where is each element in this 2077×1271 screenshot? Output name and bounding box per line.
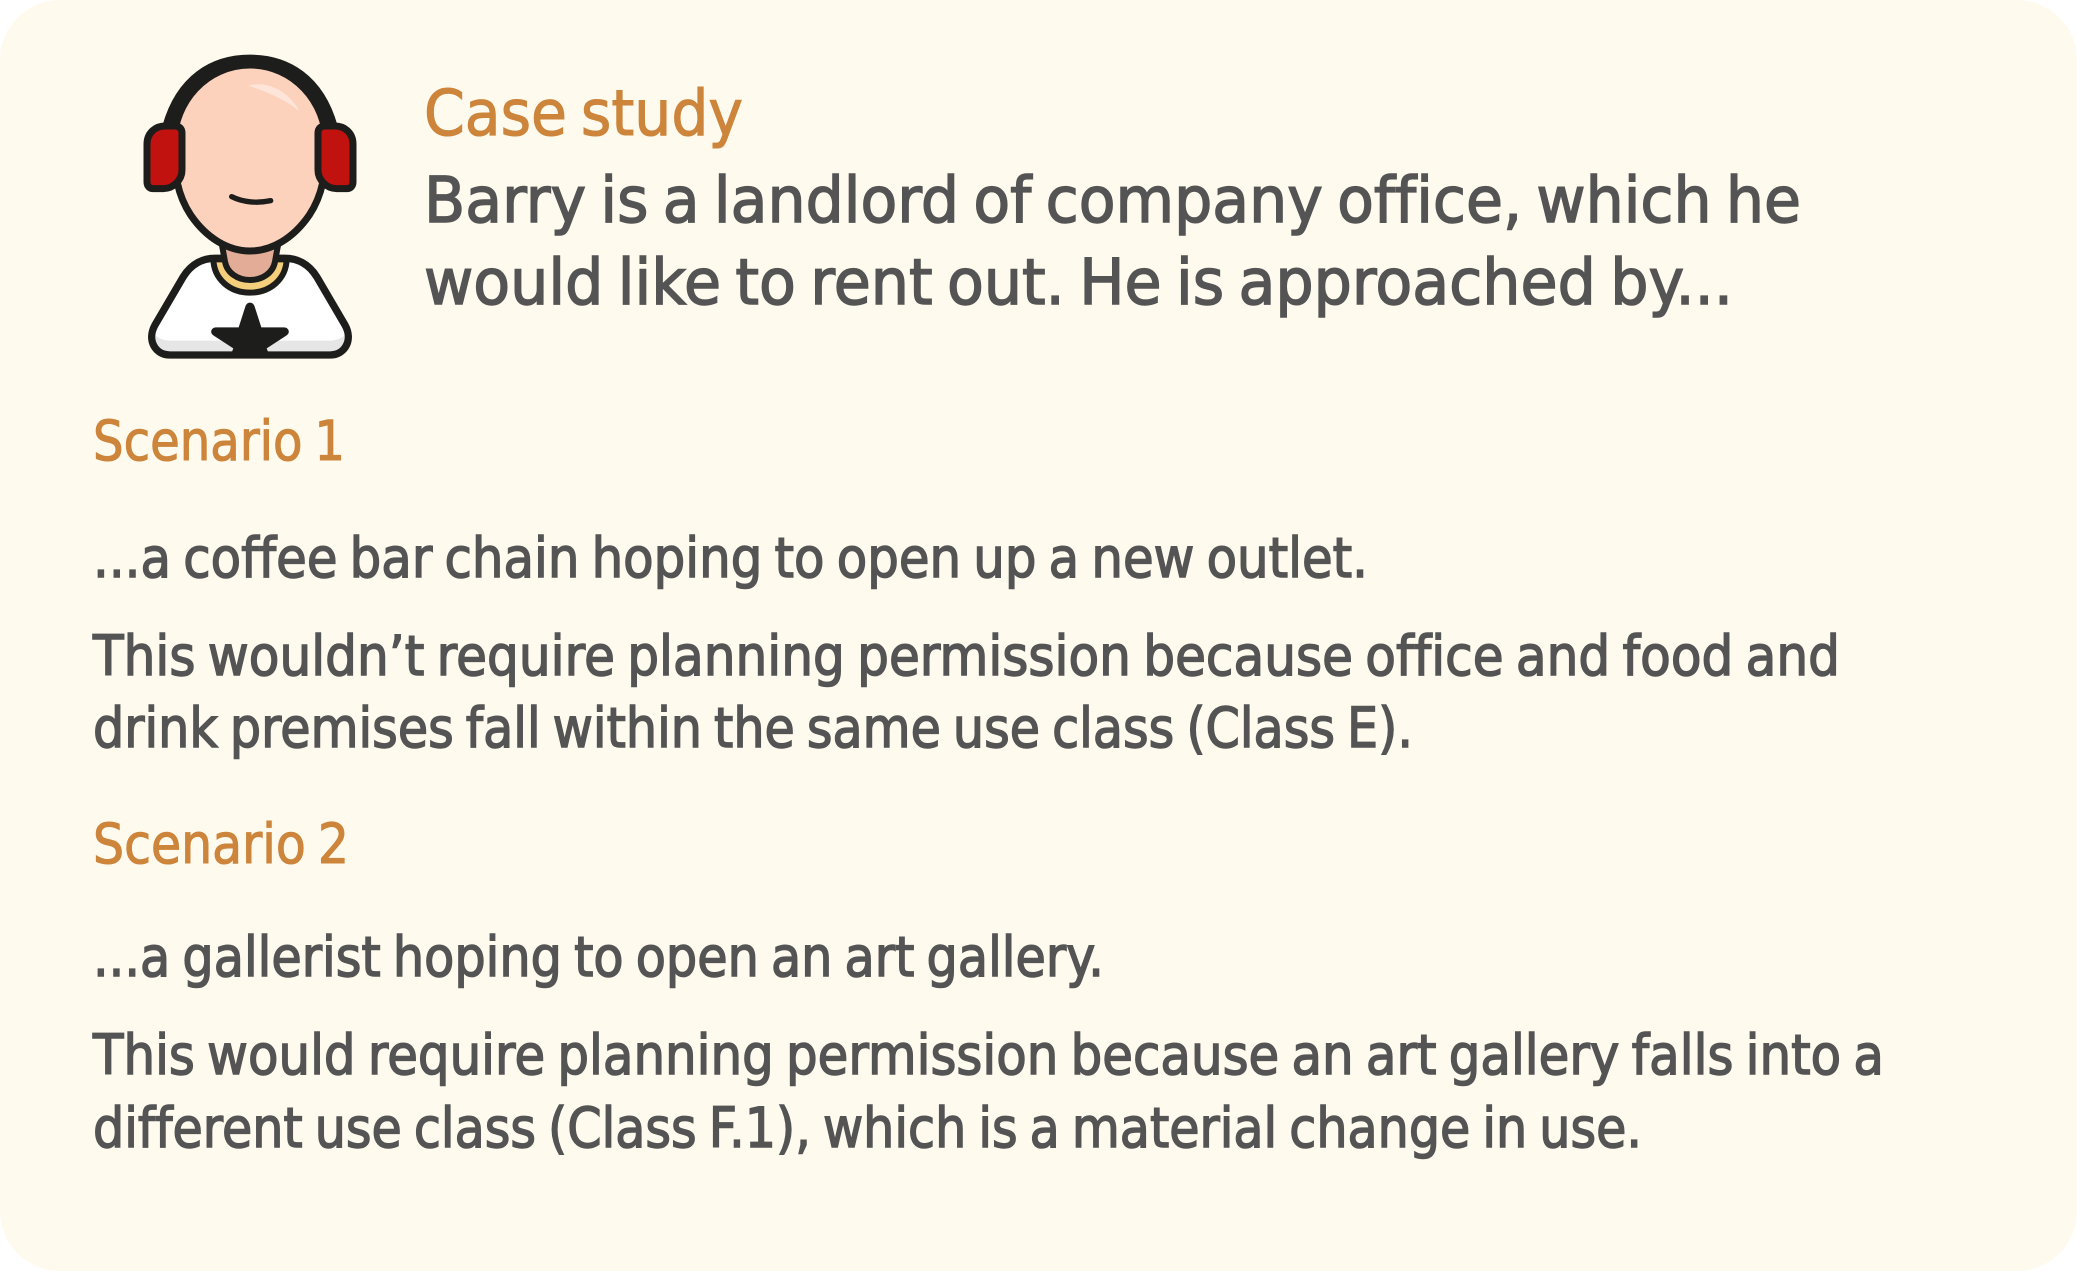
text block: scenario 2	[92, 925, 1884, 1160]
text block: scenario 2: different use class (Class F.1), which is a material change in use.	[93, 1096, 1642, 1160]
intro text: would like to rent out. He is approached by...	[424, 246, 1733, 319]
text block: scenario 2: ...a gallerist hoping to open an art gallery.	[93, 925, 1104, 989]
heading: Case study: Case study	[424, 77, 743, 150]
intro text	[424, 164, 1801, 319]
text block: scenario 2: This would require planning permission because an art gallery falls into a	[92, 1023, 1884, 1087]
heading: Scenario 1: Scenario 1	[93, 409, 345, 473]
text block: scenario 1: drink premises fall within the same use class (Class E).	[93, 696, 1413, 760]
text block: scenario 1: This wouldn’t require planning permission because office and food and	[92, 624, 1840, 688]
icon: landlord Barry with headphones	[147, 61, 353, 357]
heading: Scenario 2: Scenario 2	[93, 812, 349, 876]
intro text: Barry is a landlord of company office, which he	[424, 164, 1801, 237]
text block: scenario 1	[92, 526, 1840, 760]
text block: scenario 1: ...a coffee bar chain hoping to open up a new outlet.	[93, 526, 1368, 590]
